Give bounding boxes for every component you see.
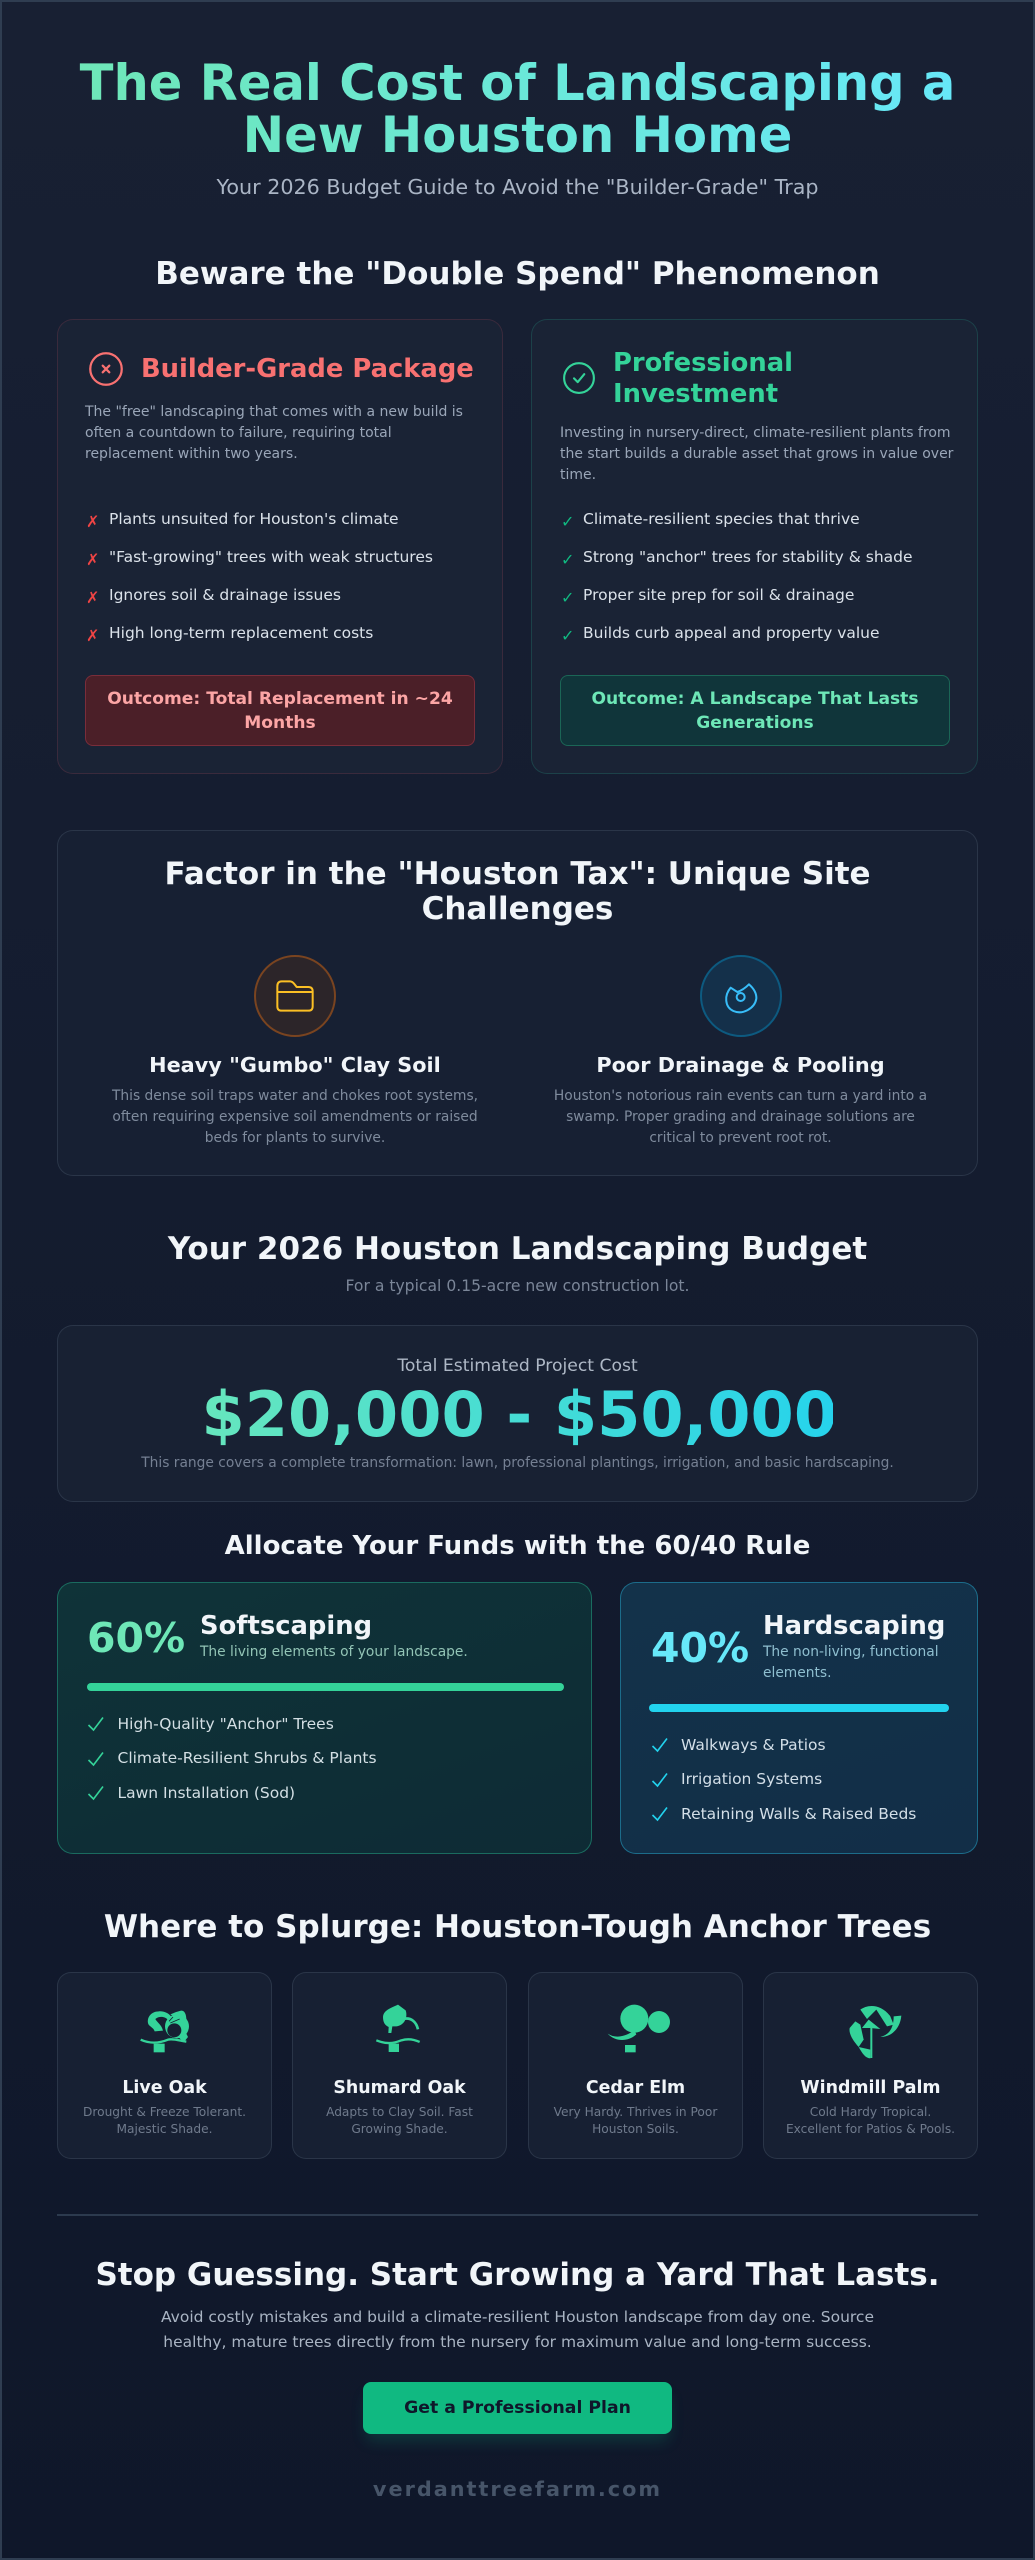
card description	[84, 404, 463, 462]
card title	[613, 348, 793, 408]
live oak name: Live Oak	[122, 2078, 207, 2098]
clay soil text	[112, 1088, 478, 1146]
heading: houston tax: Challenges	[422, 891, 613, 927]
softscaping description: The living elements of your landscape.	[200, 1644, 468, 1660]
outcome callout: replacement	[85, 675, 475, 746]
hardscaping description	[762, 1644, 939, 1681]
panel: softscaping	[57, 1582, 592, 1854]
live oak description: Majestic Shade.	[116, 2122, 212, 2136]
list: builder-grade drawbacks: ✗	[86, 588, 99, 607]
list: builder-grade drawbacks: High long-term replacement costs	[109, 624, 373, 642]
list: builder-grade drawbacks: ✗	[86, 512, 99, 531]
hardscaping list: Irrigation Systems	[681, 1770, 822, 1788]
softscaping title: Softscaping	[200, 1611, 372, 1641]
icon: water swirl	[700, 955, 782, 1037]
windmill palm description: Cold Hardy Tropical.	[810, 2105, 931, 2119]
title: The Real Cost of Landscaping a	[80, 54, 955, 112]
panel: houston tax	[57, 830, 978, 1176]
list: professional benefits	[561, 510, 913, 645]
column: clay soil	[112, 955, 478, 1146]
icon: folder	[254, 955, 336, 1037]
clay soil text: often requiring expensive soil amendments or raised	[112, 1109, 478, 1125]
card description: time.	[560, 467, 596, 483]
cost label: Total Estimated Project Cost	[397, 1356, 638, 1376]
list: professional benefits: Climate-resilient species that thrive	[583, 510, 860, 528]
card description	[560, 425, 954, 483]
outcome callout: lasting landscape: Generations	[696, 712, 814, 732]
heading: anchor trees: Where to Splurge: Houston-Tough Anchor Trees	[104, 1909, 931, 1945]
card description: The "free" landscaping that comes with a new build is	[85, 404, 463, 420]
softscaping bar	[87, 1683, 564, 1691]
button: get a professional plan: Get a Professional Plan	[404, 2398, 631, 2418]
card: windmill palm	[763, 1972, 978, 2159]
drainage heading: Poor Drainage & Pooling	[596, 1053, 885, 1077]
card description: replacement within two years.	[85, 446, 298, 462]
drainage text: swamp. Proper grading and drainage solutions are	[566, 1109, 915, 1125]
shumard oak description: Adapts to Clay Soil. Fast	[326, 2105, 473, 2119]
panel: builder-grade package	[57, 319, 503, 774]
heading: houston tax	[164, 856, 871, 927]
column: drainage	[554, 955, 927, 1146]
icon: windmill palm	[850, 2006, 902, 2058]
button: get a professional plan	[363, 2382, 672, 2434]
hardscaping description: The non-living, functional	[763, 1644, 939, 1660]
cedar elm name: Cedar Elm	[586, 2078, 685, 2098]
shumard oak name: Shumard Oak	[333, 2078, 466, 2098]
clay soil heading: Heavy "Gumbo" Clay Soil	[149, 1053, 441, 1077]
list: builder-grade drawbacks: ✗	[86, 626, 99, 645]
list: professional benefits: ✓	[561, 550, 574, 569]
cedar elm description: Houston Soils.	[592, 2122, 679, 2136]
drainage text: critical to prevent root rot.	[649, 1130, 832, 1146]
icon: check circle	[563, 362, 595, 394]
heading: call to action: Stop Guessing. Start Growing a Yard That Lasts.	[95, 2257, 940, 2293]
hardscaping list: Retaining Walls & Raised Beds	[681, 1805, 916, 1823]
outcome callout: replacement: Months	[244, 712, 316, 732]
list: builder-grade drawbacks: "Fast-growing" trees with weak structures	[109, 548, 433, 566]
live oak description: Drought & Freeze Tolerant.	[83, 2105, 246, 2119]
budget subheading: For a typical 0.15-acre new construction lot.	[346, 1277, 689, 1295]
cost note: This range covers a complete transformation: lawn, professional plantings, irrigation, and basic hardscaping.	[141, 1455, 894, 1471]
outcome callout: lasting landscape	[560, 675, 950, 746]
shumard oak description	[326, 2105, 473, 2136]
call to action text: healthy, mature trees directly from the nursery for maximum value and long-term success.	[163, 2332, 872, 2350]
list: builder-grade drawbacks: ✗	[86, 550, 99, 569]
outcome callout: replacement: Outcome: Total Replacement in ~24	[107, 688, 453, 708]
live oak description	[83, 2105, 246, 2136]
footer url: verdanttreefarm.com	[373, 2476, 662, 2500]
call to action text	[161, 2308, 874, 2350]
hardscaping list: Walkways & Patios	[681, 1736, 826, 1754]
card: cedar elm	[528, 1972, 743, 2159]
card: shumard oak	[292, 1972, 507, 2159]
windmill palm description	[786, 2105, 955, 2136]
icon: shumard oak	[376, 2004, 420, 2052]
subtitle: Your 2026 Budget Guide to Avoid the "Builder-Grade" Trap	[216, 175, 819, 199]
hardscaping title: Hardscaping	[763, 1611, 945, 1641]
card title: Investment	[613, 378, 778, 408]
softscaping percent: 60%	[87, 1614, 185, 1662]
cost figure: $20,000 - $50,000	[202, 1378, 837, 1451]
hardscaping percent: 40%	[651, 1624, 749, 1672]
hardscaping description: elements.	[763, 1665, 831, 1681]
call to action text: Avoid costly mistakes and build a climate-resilient Houston landscape from day one. Source	[161, 2308, 874, 2326]
heading: budget: Your 2026 Houston Landscaping Budget	[168, 1231, 867, 1267]
list: professional benefits: ✓	[561, 588, 574, 607]
cedar elm description: Very Hardy. Thrives in Poor	[554, 2105, 717, 2119]
card title: Builder-Grade Package	[141, 354, 474, 384]
softscaping list: High-Quality "Anchor" Trees	[118, 1715, 334, 1733]
drainage text: Houston's notorious rain events can turn a yard into a	[554, 1088, 927, 1104]
list: professional benefits: ✓	[561, 626, 574, 645]
cedar elm description	[554, 2105, 718, 2136]
windmill palm name: Windmill Palm	[800, 2078, 941, 2098]
list: builder-grade drawbacks: Plants unsuited for Houston's climate	[109, 510, 399, 528]
list: builder-grade drawbacks: Ignores soil & drainage issues	[109, 586, 341, 604]
card: live oak	[57, 1972, 272, 2159]
outcome callout: lasting landscape: Outcome: A Landscape That Lasts	[591, 688, 918, 708]
clay soil text: beds for plants to survive.	[205, 1130, 385, 1146]
hardscaping bar	[649, 1704, 949, 1712]
drainage text	[554, 1088, 927, 1146]
title	[70, 57, 965, 161]
list: builder-grade drawbacks	[86, 510, 433, 645]
list: professional benefits: Strong "anchor" trees for stability & shade	[583, 548, 913, 566]
windmill palm description: Excellent for Patios & Pools.	[786, 2122, 955, 2136]
clay soil text: This dense soil traps water and chokes root systems,	[112, 1088, 478, 1104]
list: professional benefits: ✓	[561, 512, 574, 531]
heading: houston tax: Factor in the "Houston Tax": Unique Site	[164, 856, 871, 892]
panel: total cost	[57, 1325, 978, 1502]
card title: Professional	[613, 348, 793, 378]
heading: 60/40 rule: Allocate Your Funds with the 60/40 Rule	[225, 1531, 810, 1561]
hardscaping list	[652, 1736, 916, 1823]
icon: x circle	[89, 352, 123, 386]
icon: live oak	[140, 2010, 189, 2052]
panel: hardscaping	[620, 1582, 978, 1854]
softscaping list: Lawn Installation (Sod)	[118, 1784, 295, 1802]
heading: double spend: Beware the "Double Spend" Phenomenon	[155, 256, 880, 292]
card description: Investing in nursery-direct, climate-resilient plants from	[560, 425, 951, 441]
card description: the start builds a durable asset that grows in value over	[560, 446, 953, 462]
list: professional benefits: Proper site prep for soil & drainage	[583, 586, 854, 604]
list: professional benefits: Builds curb appeal and property value	[583, 624, 880, 642]
shumard oak description: Growing Shade.	[351, 2122, 448, 2136]
icon: cedar elm	[608, 2004, 670, 2052]
card description: often a countdown to failure, requiring total	[85, 425, 392, 441]
title: New Houston Home	[243, 106, 792, 164]
softscaping list: Climate-Resilient Shrubs & Plants	[118, 1749, 377, 1767]
softscaping list	[88, 1715, 377, 1802]
panel: professional investment	[531, 319, 978, 774]
